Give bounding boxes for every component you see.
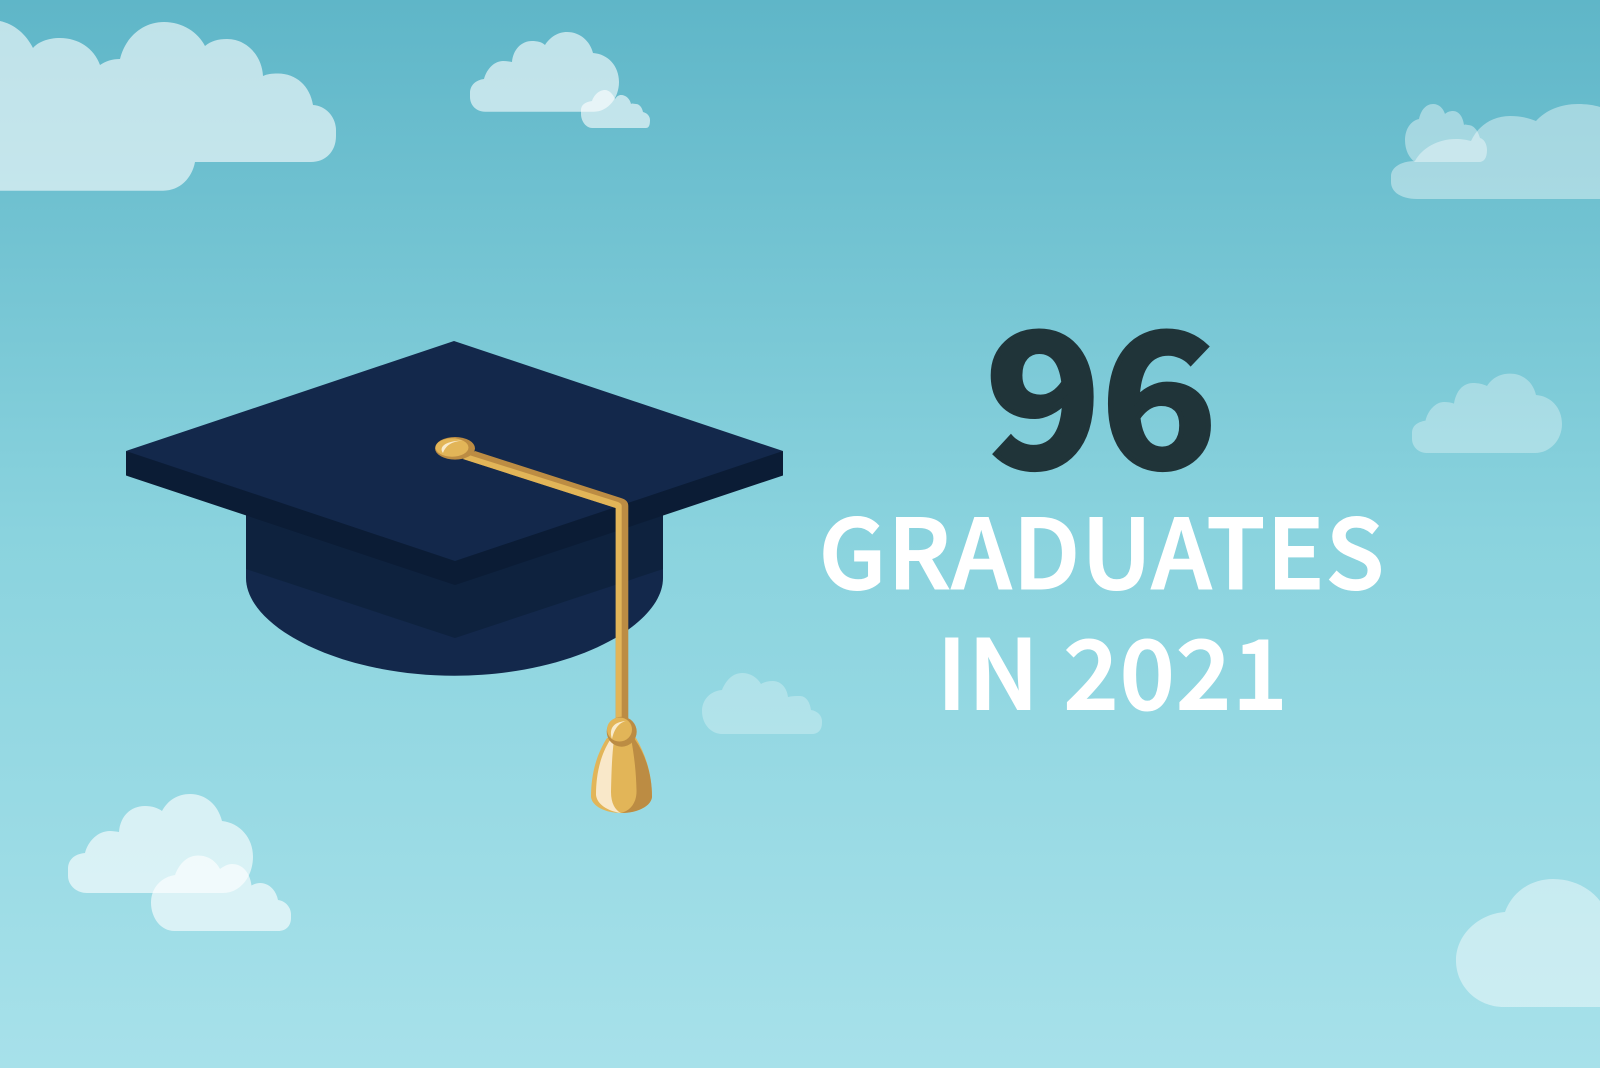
tassel xyxy=(435,437,652,813)
cap skull xyxy=(246,500,663,676)
cap skull shadow xyxy=(246,500,663,638)
cloud: top middle xyxy=(470,32,619,112)
big number: 96: 96 xyxy=(986,253,1216,521)
tassel body xyxy=(591,738,652,813)
tassel knot xyxy=(607,717,637,747)
cloud: bottom left front xyxy=(151,856,291,931)
cloud: right middle xyxy=(1412,374,1562,453)
tassel cord xyxy=(463,455,622,722)
cloud: large top right xyxy=(1391,104,1600,199)
heading line: GRADUATES: GRADUATES xyxy=(819,478,1384,616)
cloud: small top middle xyxy=(581,90,650,128)
cloud: bottom left back xyxy=(68,794,253,893)
icon: graduation cap xyxy=(126,341,783,813)
tassel button xyxy=(435,437,475,460)
cloud: small top right xyxy=(1405,104,1487,162)
cloud: beside tassel xyxy=(702,673,822,734)
cloud: large top left xyxy=(0,21,336,191)
heading line: IN 2021: IN 2021 xyxy=(937,598,1287,737)
tassel cord shadow xyxy=(463,451,628,722)
cap board top xyxy=(126,341,783,561)
cap board side xyxy=(126,451,783,585)
cloud: bottom right xyxy=(1456,879,1600,1007)
